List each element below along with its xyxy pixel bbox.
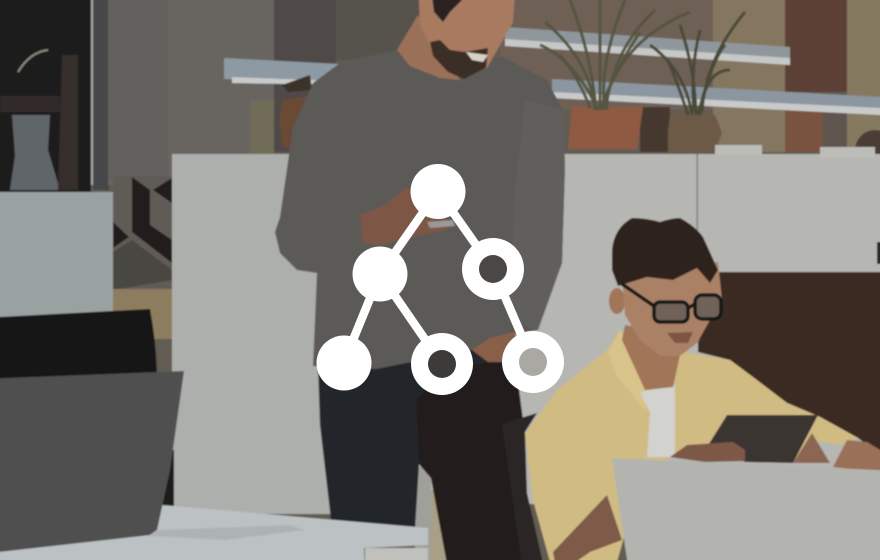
laptop right foreground xyxy=(612,458,880,560)
right middle ring node xyxy=(462,238,524,300)
ceiling lamp bars xyxy=(224,27,880,116)
right middle ring hole xyxy=(479,255,507,283)
rug and floor xyxy=(113,176,173,290)
smile xyxy=(466,52,488,62)
hand at hip xyxy=(472,332,517,362)
jeans xyxy=(318,345,523,560)
phone xyxy=(427,220,455,228)
right hand xyxy=(793,433,830,463)
connector lines xyxy=(344,191,533,364)
paper on desk xyxy=(150,525,305,540)
floor between legs xyxy=(415,467,431,560)
dark partition right xyxy=(698,272,880,470)
tablet xyxy=(707,415,818,463)
face xyxy=(418,0,516,78)
bottom centre ring node xyxy=(411,333,473,395)
bottom centre ring hole xyxy=(428,350,456,378)
beard xyxy=(430,40,488,79)
bottom left node xyxy=(316,336,372,390)
clay pot at left of man xyxy=(280,95,315,148)
plants and pots xyxy=(280,0,745,152)
neck xyxy=(397,15,460,80)
left hand xyxy=(670,442,745,462)
t-shirt xyxy=(640,385,675,457)
bottom right ring hole xyxy=(519,348,547,376)
chair leg left xyxy=(160,450,174,506)
ear xyxy=(609,288,625,314)
hair xyxy=(612,218,718,286)
glasses xyxy=(622,284,721,322)
large plant xyxy=(540,0,690,110)
terracotta pot xyxy=(568,107,643,149)
top node xyxy=(410,164,466,219)
desk xyxy=(0,505,428,560)
laptop left xyxy=(0,371,184,554)
bottom right ring node xyxy=(502,331,564,393)
sweater xyxy=(275,50,565,369)
hand on phone xyxy=(360,187,447,245)
black chair back left xyxy=(0,309,157,380)
desk drawer xyxy=(365,548,428,560)
chair xyxy=(502,413,547,560)
white cabinets xyxy=(0,145,880,514)
mouth xyxy=(667,332,693,343)
arm xyxy=(553,495,622,560)
hair xyxy=(430,0,462,22)
left middle node xyxy=(352,246,408,302)
standing man xyxy=(275,0,565,560)
icon: network tree xyxy=(316,164,564,395)
seated man xyxy=(502,218,880,560)
right forearm xyxy=(833,440,880,475)
clay pot xyxy=(668,112,722,152)
shirt xyxy=(525,330,858,560)
small plant xyxy=(650,12,745,115)
face xyxy=(622,262,722,356)
neck xyxy=(622,325,700,390)
vase on shelf xyxy=(10,115,60,190)
